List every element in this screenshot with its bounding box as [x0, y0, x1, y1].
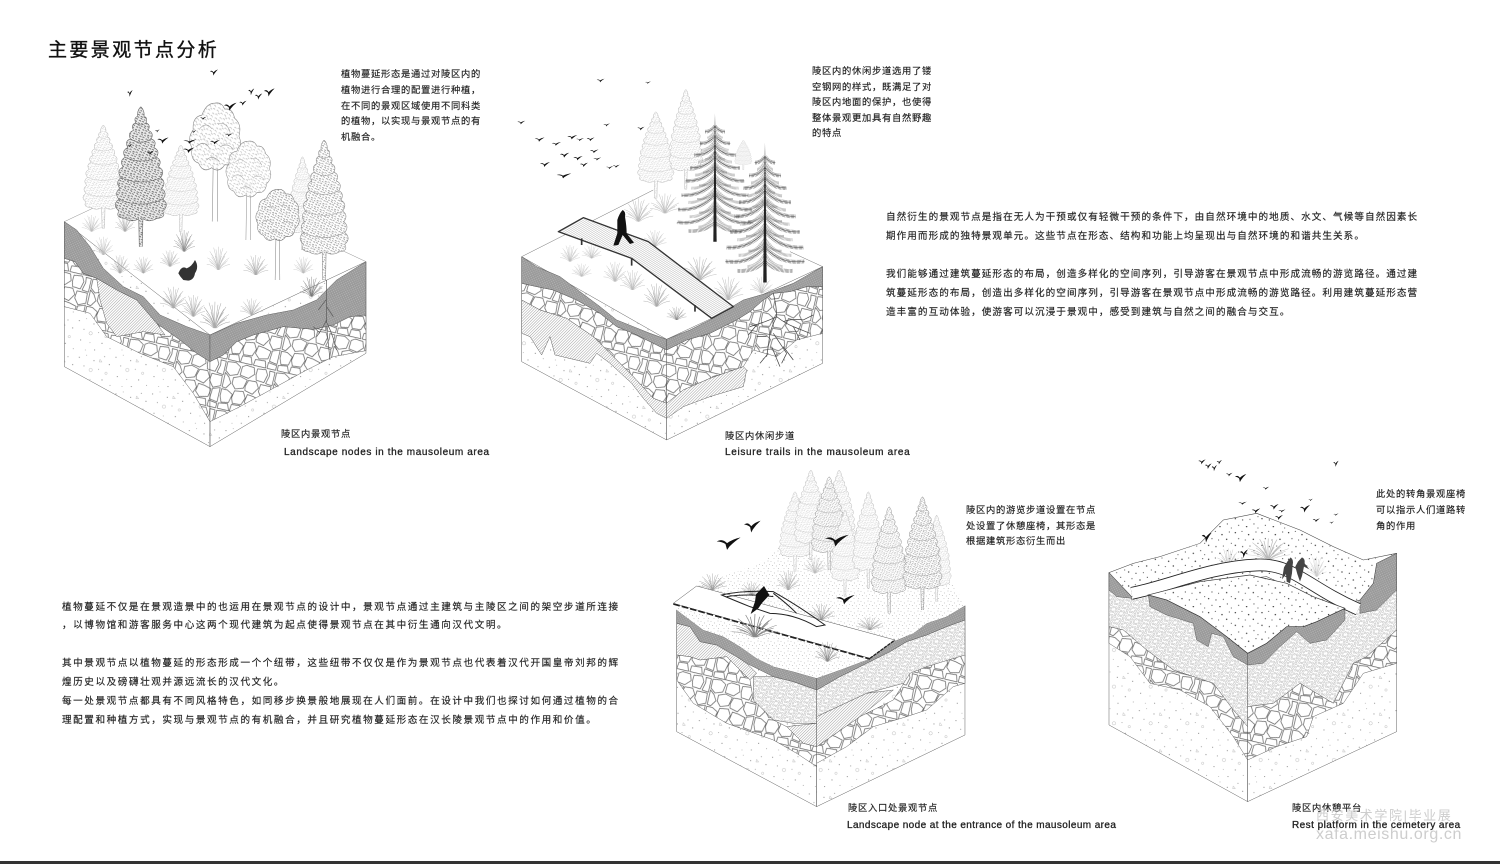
caption: rest platform: 陵区内休憩平台: [1292, 803, 1362, 813]
caption: leisure trails: Leisure trails in the mausoleum area: [725, 447, 910, 458]
caption: landscape nodes: Landscape nodes in the mausoleum area: [284, 447, 490, 458]
block 3 top surface: [677, 547, 965, 678]
block 2 soil section: [522, 190, 823, 440]
text block: entrance note: 陵区内的游览步道设置在节点 处设置了休憩座椅，其形态是 根据建筑形态衍生而出: [966, 505, 1096, 546]
panel: entrance node block: [673, 470, 965, 807]
caption: entrance node: [847, 802, 1116, 831]
caption: leisure trails: 陵区内休闲步道: [725, 431, 795, 441]
bottom dark bar: [0, 861, 1500, 864]
walking figure: [613, 210, 634, 246]
block 1 birds: [127, 69, 275, 155]
text block: plant node note: 植物蔓延形态是通过对陵区内的 植物进行合理的配置进行种植， 在不同的景观区域使用不同科类 的植物，以实现与景观节点的有 机融合。: [341, 69, 481, 142]
block 3 plants: [698, 557, 883, 630]
block 2 spruces: [677, 113, 805, 283]
caption: rest platform: [1292, 802, 1461, 831]
text block: trail note: 陵区内的休闲步道选用了镂 空钢网的样式，既满足了对 陵区内地面的保护，也使得 整体景观更加具有自然野趣 的特点: [812, 66, 932, 138]
block 4 grass halo: [1217, 538, 1327, 577]
block 3 plants over boardwalk: [732, 614, 840, 662]
text block: plant spread description: 植物蔓延不仅是在景观造景中的也运用在景观节点的设计中，景观节点通过主建筑与主陵区之间的架空步道所连接 ，以博物馆和游客服务中心这两个现代建筑为起点使得景观节点在其中衍生通向汉代文明。 其中景观节点以植物蔓延的形态形成一个个纽带，这些纽带不仅仅是作为景观节点也代表着汉代开国皇帝刘邦的辉 煌历史以及磅礴壮观并源远流长的汉代文化。 每一处景观节点都具有不同风格特色，如同移步换景般地展现在人们面前。在设计中我们也探讨如何通过植物的合 理配置和种植方式，实现与景观节点的有机融合，并且研究植物蔓延形态在汉长陵景观节点中的作用和价值。: [62, 602, 620, 726]
caption: leisure trails: [725, 430, 910, 458]
block 2 birds: [517, 79, 651, 178]
block 3 trees: [779, 470, 951, 613]
caption: entrance node: Landscape node at the entrance of the mausoleum area: [847, 820, 1116, 831]
block 4 front surface: [1148, 575, 1345, 653]
watermark: xafa.meishu.org.cn: [1316, 826, 1462, 843]
text block: natural nodes description: 自然衍生的景观节点是指在无人为干预或仅有轻微干预的条件下，由自然环境中的地质、水文、气候等自然因素长 期作用而形成的独特景观单元。这些节点在形态、结构和功能上均呈现出与自然环境的和谐共生关系。 我们能够通过建筑蔓延形态的布局，创造多样化的空间序列，引导游客在景观节点中形成流畅的游览路径。通过建 筑蔓延形态的布局，创造出多样化的空间序列，引导游客在景观节点中形成流畅的游览路径。利用建筑蔓延形态营 造丰富的互动体验，使游客可以沉浸于景观中，感受到建筑与自然之间的融合与交互。: [886, 212, 1418, 318]
block 2 light trees: [638, 89, 752, 198]
block 1 soil section: [64, 203, 366, 447]
panel: leisure trails block: [517, 79, 823, 440]
caption: entrance node: 陵区入口处景观节点: [848, 803, 938, 813]
block 4 soil section: [1109, 553, 1397, 802]
text block: corner note: 此处的转角景观座椅 可以指示人们道路转 角的作用: [1376, 489, 1466, 531]
caption: landscape nodes: [281, 428, 490, 458]
block 1 roots: [313, 280, 337, 360]
watermark: 西安美术学院|毕业展: [1316, 808, 1452, 823]
caption: rest platform: Rest platform in the cemetery area: [1292, 820, 1461, 831]
boardwalk: [558, 218, 733, 318]
block 4 back mound: [1109, 513, 1397, 607]
block 4 curving path: [1132, 565, 1358, 609]
seated figure: [751, 586, 769, 614]
caption: landscape nodes: 陵区内景观节点: [281, 429, 351, 439]
two figures: [1282, 557, 1309, 583]
icon: black grouse: [178, 260, 197, 281]
block 3 soil section: [677, 606, 965, 807]
title: 主要景观节点分析: [48, 40, 219, 61]
block 4 birds: [1198, 459, 1339, 558]
panel: rest platform block: [1109, 459, 1397, 802]
block 1 ground plants: [82, 213, 323, 328]
block 3 birds: [717, 521, 855, 604]
panel: landscape nodes block: [64, 69, 366, 447]
block 1 trees: [83, 103, 348, 280]
block 2 plants: [560, 193, 773, 320]
block 2 roots: [748, 293, 813, 367]
boardwalk with seat: [673, 586, 895, 659]
watermark: [1316, 808, 1462, 843]
